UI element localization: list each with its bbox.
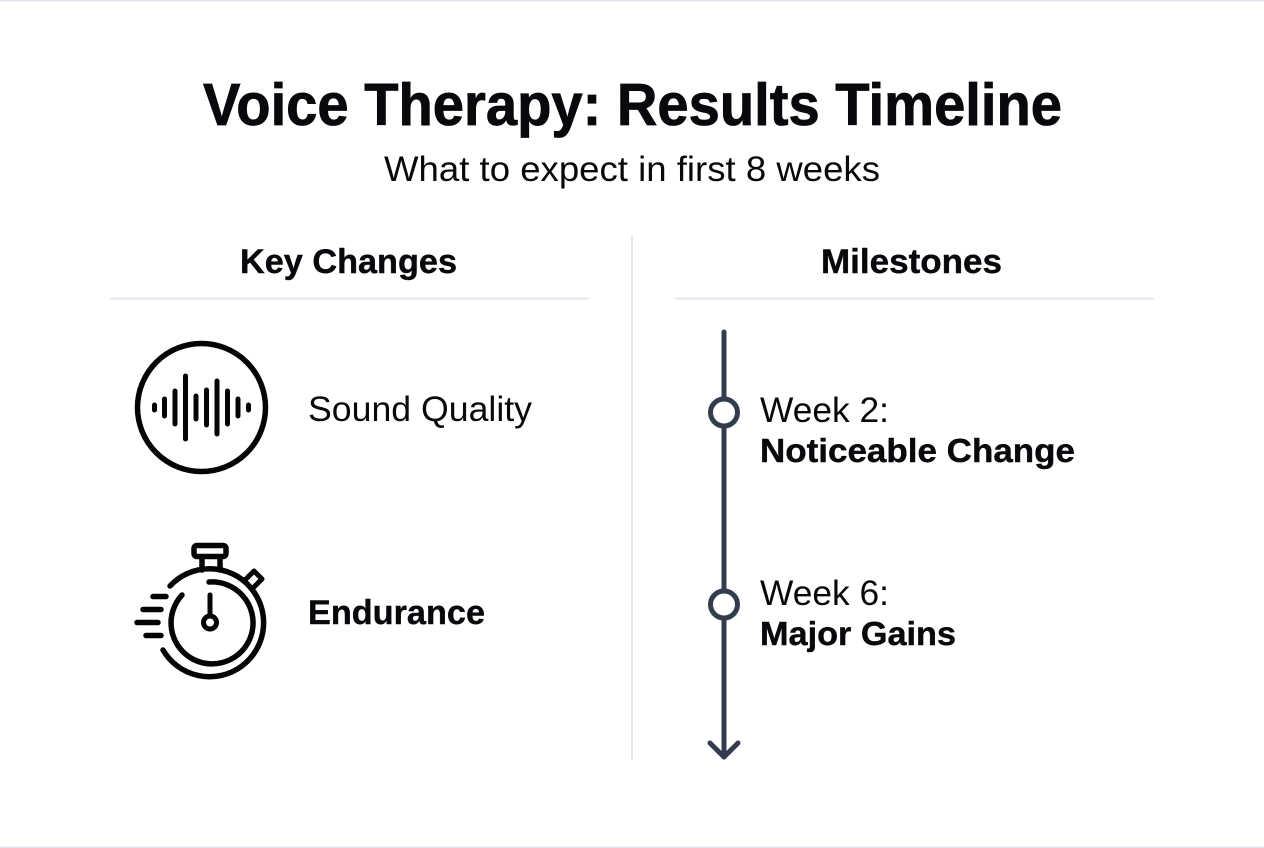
title: Voice Therapy: Results Timeline: [203, 72, 1062, 138]
icon: sound wave: [138, 344, 266, 472]
label: sound quality: Sound Quality: [308, 390, 532, 429]
milestone: week 6: [760, 574, 956, 652]
heading: milestones: Milestones: [821, 243, 1002, 281]
timeline arrow: [710, 332, 738, 757]
marker: week 2: [710, 399, 738, 426]
milestone: week 2: Week 2:: [760, 391, 889, 430]
milestone: week 2: Noticeable Change: [760, 432, 1075, 469]
marker: week 6: [710, 591, 738, 618]
heading: key changes: Key Changes: [240, 243, 457, 281]
label: endurance: Endurance: [308, 594, 485, 632]
subtitle: What to expect in first 8 weeks: [384, 150, 880, 189]
milestone: week 6: Major Gains: [760, 615, 956, 652]
icon: stopwatch: [137, 546, 264, 677]
milestone: week 6: Week 6:: [760, 574, 889, 613]
panel: key changes: [110, 243, 589, 677]
panel: milestones: [675, 243, 1154, 757]
milestone: week 2: [760, 391, 1075, 469]
